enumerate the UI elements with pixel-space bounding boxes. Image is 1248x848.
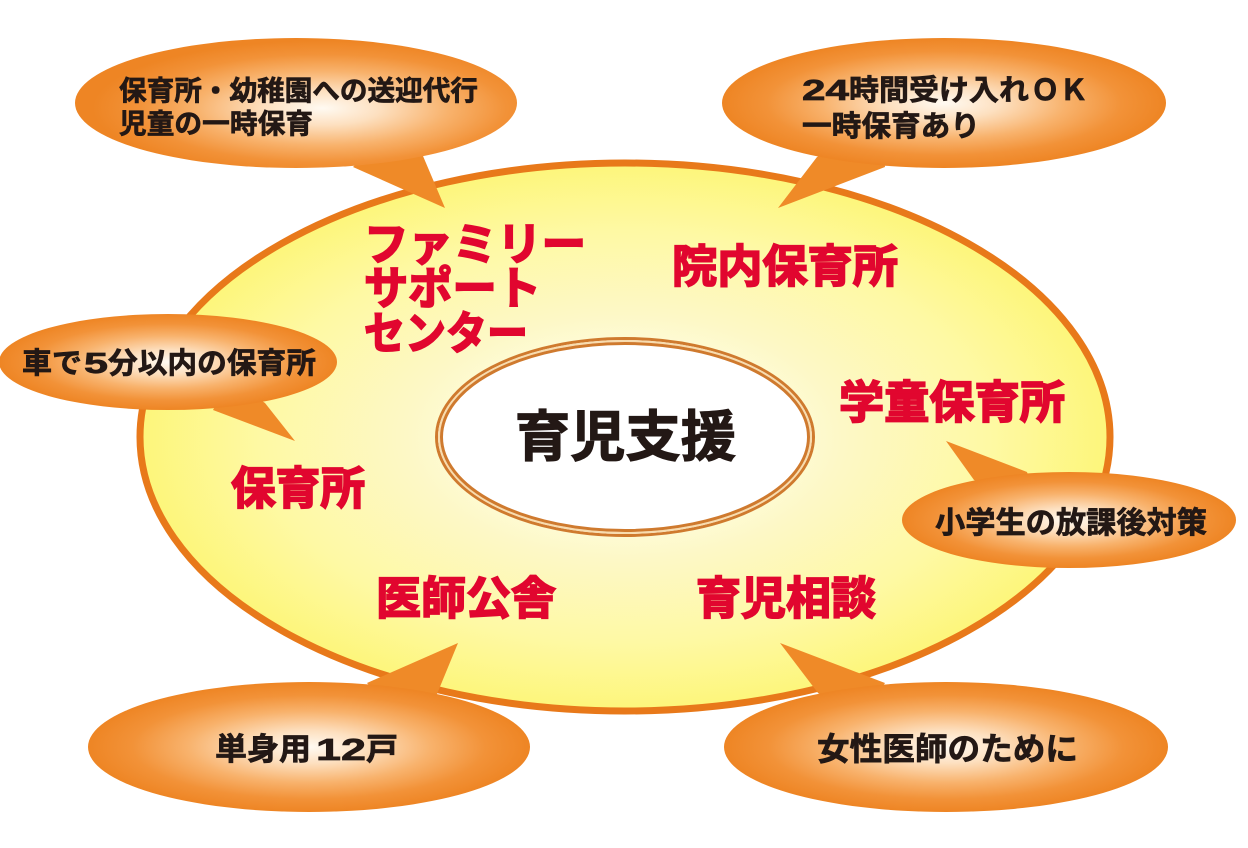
callout: 小学生の放課後対策: 小学生の放課後対策 <box>935 507 1207 540</box>
center ellipse: 育児支援: 育児支援 <box>515 406 736 468</box>
label: 院内保育所: 院内保育所 <box>672 241 898 292</box>
callout: 女性医師のために <box>724 643 1168 812</box>
callout: 24時間受け入れOK: ＯＫ <box>1031 75 1088 107</box>
callout: 単身用12戸: 12 <box>316 732 366 767</box>
callout: 24時間受け入れOK: 24 <box>802 75 849 107</box>
center ellipse: 育児支援 <box>436 338 814 536</box>
callout: 保育所・幼稚園への送迎代行: 児童の一時保育 <box>119 108 313 139</box>
callout: 単身用12戸 <box>88 643 530 812</box>
label: 保育所: 保育所 <box>231 463 365 514</box>
label: ファミリーサポートセンター: センター <box>364 308 528 359</box>
callout: 女性医師のために: 女性医師のために <box>817 731 1078 767</box>
main yellow ellipse <box>140 163 1110 711</box>
callout: 保育所・幼稚園への送迎代行 <box>75 38 517 208</box>
callout: 24時間受け入れOK: 時間受け入れ <box>849 74 1029 107</box>
label: ファミリーサポートセンター: サポート <box>364 263 541 314</box>
callout: 車で5分以内の保育所: 5 <box>84 348 108 380</box>
callout: 車で5分以内の保育所 <box>0 314 337 441</box>
label: 育児相談: 育児相談 <box>696 573 876 624</box>
label: ファミリーサポートセンター <box>364 219 586 359</box>
callout: 24時間受け入れOK <box>722 38 1166 208</box>
callout: 車で5分以内の保育所: 分以内の保育所 <box>108 347 316 380</box>
label: ファミリーサポートセンター: ファミリー <box>364 219 586 270</box>
callout: 単身用12戸: 戸 <box>366 732 398 767</box>
label: 学童保育所: 学童保育所 <box>839 377 1065 428</box>
callout: 小学生の放課後対策 <box>902 441 1236 568</box>
label: 医師公舎: 医師公舎 <box>376 573 556 624</box>
callout: 24時間受け入れOK: 一時保育あり <box>802 110 980 143</box>
callout: 単身用12戸: 単身用 <box>215 732 311 767</box>
callout: 保育所・幼稚園への送迎代行: 保育所・幼稚園への送迎代行 <box>119 75 478 106</box>
callout: 車で5分以内の保育所: 車で <box>22 347 82 380</box>
